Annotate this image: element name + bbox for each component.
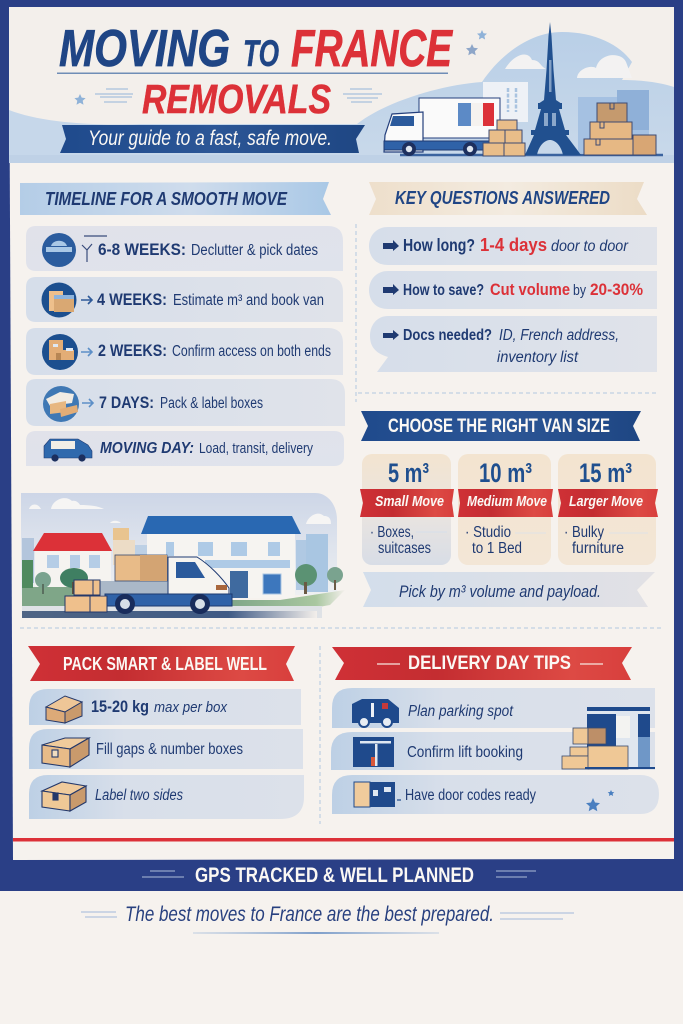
card: 10 m3 bbox=[458, 454, 553, 565]
row: 6-8 weeks bbox=[26, 226, 343, 271]
icon: box bbox=[46, 696, 82, 723]
stars bbox=[586, 790, 614, 811]
question: how long: door to door bbox=[551, 238, 629, 255]
question: how long: 1-4 days bbox=[480, 234, 547, 255]
row: label sides bbox=[29, 775, 304, 819]
moving truck with french flag bbox=[384, 98, 500, 156]
note: pick by volume bbox=[363, 572, 655, 607]
row: parking: Plan parking spot bbox=[408, 703, 514, 720]
tagline ribbon: Your guide to a fast, safe move. bbox=[88, 127, 332, 150]
icon: door and box bbox=[354, 782, 401, 807]
card: 15 m3: furniture bbox=[572, 540, 624, 557]
row: 4 weeks bbox=[26, 277, 343, 322]
row: 6-8 weeks: 6-8 WEEKS: bbox=[98, 240, 186, 259]
illustration: street scene with van bbox=[21, 493, 345, 618]
heading: delivery tips: DELIVERY DAY TIPS bbox=[408, 653, 571, 674]
question: docs needed: inventory list bbox=[497, 349, 579, 366]
row: 7 days bbox=[26, 379, 345, 426]
row: 2 weeks: 2 WEEKS: bbox=[98, 341, 167, 360]
note: pick by volume: Pick by m³ volume and payload. bbox=[399, 582, 601, 601]
icon: labelled box bbox=[42, 782, 86, 811]
icon: van bbox=[44, 439, 92, 462]
card: 10 m3: to 1 Bed bbox=[472, 540, 522, 557]
card: 15 m3 bbox=[558, 454, 658, 565]
decorative stars bbox=[74, 30, 487, 105]
question: how long bbox=[369, 227, 657, 265]
icon: parking van bbox=[352, 699, 399, 727]
question: how to save: How to save? bbox=[403, 282, 484, 299]
closing tagline bbox=[81, 903, 574, 934]
card: 15 m3: 15 m³ bbox=[579, 458, 632, 488]
question: docs needed: ID, French address, bbox=[499, 327, 619, 344]
question: how to save: Cut volume bbox=[490, 281, 570, 299]
title: moving to france: TO bbox=[243, 33, 279, 74]
card: 10 m3: 10 m³ bbox=[479, 458, 532, 488]
panel: delivery tips bbox=[331, 647, 659, 814]
card: 10 m3: Medium Move bbox=[467, 494, 547, 510]
row: door codes bbox=[332, 775, 659, 814]
card: 5 m3 bbox=[360, 454, 454, 565]
icon: open box bbox=[42, 282, 92, 318]
card: 15 m3: Larger Move bbox=[569, 494, 643, 510]
section dividers bbox=[20, 224, 663, 824]
large box stack bbox=[584, 103, 656, 155]
heading: van sizes bbox=[361, 411, 641, 441]
panel: key questions bbox=[369, 182, 657, 372]
heading: pack smart: PACK SMART & LABEL WELL bbox=[63, 653, 267, 674]
card: 5 m3: · Boxes, bbox=[370, 524, 414, 541]
heading: timeline: TIMELINE FOR A SMOOTH MOVE bbox=[45, 188, 288, 209]
row: 4 weeks: 4 WEEKS: bbox=[97, 290, 167, 309]
title: moving to france bbox=[57, 20, 453, 78]
heading: key questions: KEY QUESTIONS ANSWERED bbox=[395, 187, 610, 208]
heading: delivery tips bbox=[332, 647, 632, 680]
row: moving day: Load, transit, delivery bbox=[199, 441, 314, 457]
closing tagline: The best moves to France are the best prepared. bbox=[125, 903, 494, 926]
row: door codes: Have door codes ready bbox=[405, 787, 536, 804]
red divider line bbox=[13, 838, 674, 842]
row: 4 weeks: Estimate m³ and book van bbox=[173, 292, 324, 309]
icon: decluttering bbox=[42, 233, 107, 267]
eiffel tower bbox=[525, 22, 581, 155]
title: moving to france: MOVING bbox=[59, 20, 230, 78]
question: docs needed: Docs needed? bbox=[403, 327, 492, 344]
row: 6-8 weeks: Declutter & pick dates bbox=[191, 242, 318, 259]
row: fill gaps: Fill gaps & number boxes bbox=[96, 741, 243, 758]
header illustration backdrop bbox=[9, 7, 674, 163]
clouds bbox=[29, 498, 331, 524]
row: box weight: 15-20 kg bbox=[91, 697, 149, 716]
heading: timeline bbox=[20, 182, 331, 215]
road bbox=[22, 606, 322, 618]
illustration: doorway and boxes bbox=[562, 707, 655, 769]
row: lift booking: Confirm lift booking bbox=[407, 744, 523, 761]
distant buildings bbox=[22, 528, 328, 592]
panel: pack smart bbox=[28, 646, 304, 819]
ground line bbox=[400, 154, 663, 156]
icon: access boxes bbox=[42, 334, 92, 370]
header banner bbox=[9, 7, 674, 163]
sky panel bbox=[21, 493, 337, 595]
card: 15 m3: · Bulky bbox=[564, 524, 604, 541]
small box stack bbox=[483, 120, 525, 156]
panel: van sizes bbox=[360, 411, 658, 607]
background buildings bbox=[483, 82, 649, 153]
icon: taped box bbox=[42, 738, 89, 767]
row: box weight bbox=[29, 689, 301, 725]
question: how to save bbox=[369, 271, 657, 309]
row: box weight: max per box bbox=[154, 699, 227, 716]
icon: lift bbox=[353, 737, 394, 767]
title: moving to france: FRANCE bbox=[291, 20, 453, 78]
blue-roof house bbox=[141, 516, 301, 598]
row: moving day bbox=[26, 431, 344, 466]
row: 7 days: 7 DAYS: bbox=[99, 393, 154, 412]
row: moving day: MOVING DAY: bbox=[100, 440, 194, 457]
heading: pack smart bbox=[28, 646, 295, 681]
row: 2 weeks: Confirm access on both ends bbox=[172, 343, 331, 360]
boxes beside van bbox=[65, 580, 107, 612]
row: 7 days: Pack & label boxes bbox=[160, 395, 263, 412]
panel: timeline bbox=[20, 182, 345, 466]
row: label sides: Label two sides bbox=[95, 787, 183, 804]
flatbed van bbox=[100, 555, 232, 614]
question: how to save: 20-30% bbox=[590, 281, 643, 299]
question: how to save: by bbox=[573, 282, 586, 299]
row: lift booking bbox=[331, 732, 655, 770]
row: fill gaps bbox=[29, 729, 303, 769]
title: removals: REMOVALS bbox=[142, 76, 331, 122]
card: 5 m3: suitcases bbox=[378, 540, 431, 557]
footer band: GPS TRACKED & WELL PLANNED bbox=[195, 864, 474, 887]
card: 5 m3: 5 m³ bbox=[388, 458, 429, 488]
row: parking bbox=[332, 688, 655, 728]
card: 10 m3: · Studio bbox=[465, 524, 511, 541]
heading: key questions bbox=[369, 182, 647, 215]
grass and trees bbox=[22, 560, 345, 612]
icon: packing boxes bbox=[43, 386, 93, 422]
row: 2 weeks bbox=[26, 328, 343, 375]
card: 5 m3: Small Move bbox=[375, 494, 444, 510]
question: docs needed bbox=[370, 316, 657, 372]
question: how long: How long? bbox=[403, 235, 475, 255]
red-roof house bbox=[33, 533, 112, 595]
heading: van sizes: CHOOSE THE RIGHT VAN SIZE bbox=[388, 416, 610, 437]
